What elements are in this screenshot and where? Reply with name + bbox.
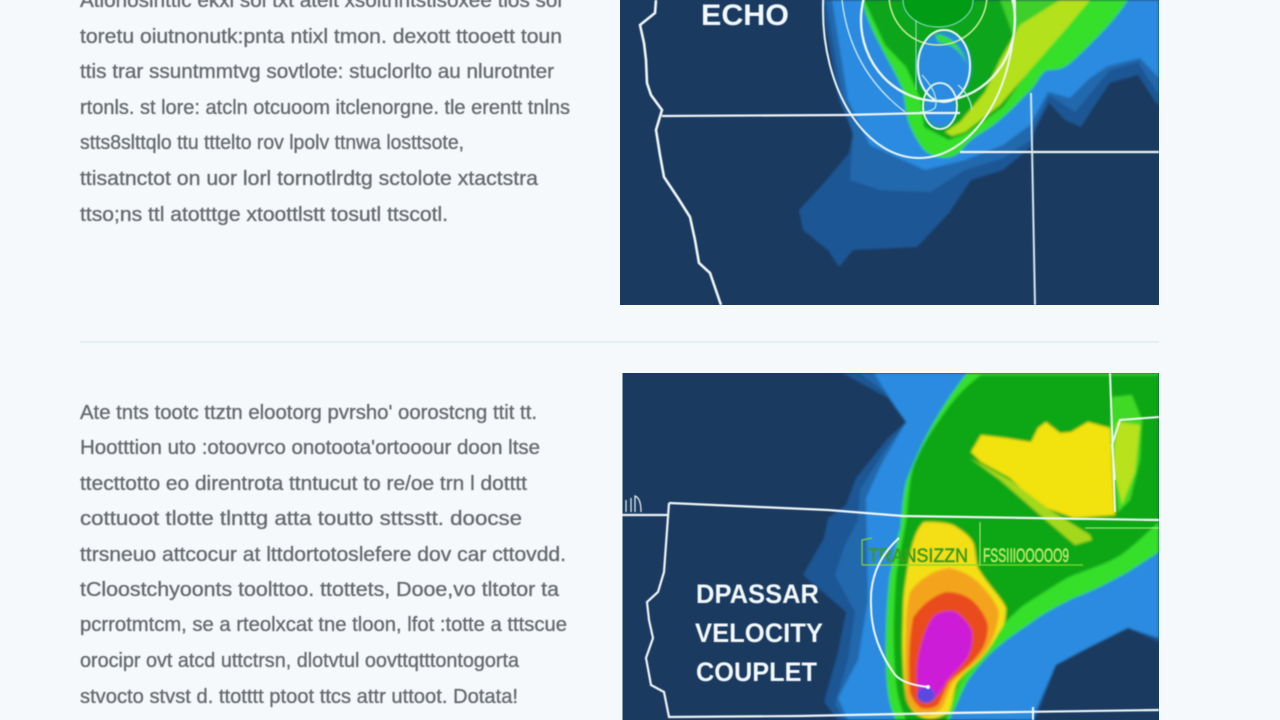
map label: velocity couplet: COUPLET [696,657,817,687]
text block: upper explanation: ttso;ns ttl atotttge xtoottlstt tosutl ttscotl. [80,204,448,226]
text block: lower explanation: Hootttion uto :otoovrco onotoota'ortooour doon ltse [80,437,540,459]
white storm contours [823,0,1015,158]
radar echo field [799,0,1159,267]
text block: upper explanation [80,0,570,226]
garbled green callout strip: TRANSIZZN [868,546,968,567]
text block: lower explanation: Ate tnts tootc ttztn elootorg pvrsho' oorostcng ttit tt. [80,402,537,424]
state borders and coastline [640,0,1159,305]
text block: lower explanation: tCloostchyoonts toolttoo. ttottets, Dooe,vo tltotor ta [80,579,560,601]
radar velocity field [803,373,1159,720]
garbled green callout strip: FSSIIIOOOOO9 [983,546,1069,567]
text block: lower explanation: orocipr ovt atcd uttctrsn, dlotvtul oovttqtttontogorta [80,650,520,672]
map label: velocity couplet: DPASSAR [696,579,819,609]
panel: top radar map [620,0,1159,305]
garbled green callout strip [862,538,1083,567]
text block: lower explanation: pcrrotmtcm, se a rteolxcat tne tloon, lfot :totte a tttscue [80,614,567,636]
text block: upper explanation: ttis trar ssuntmmtvg sovtlote: stuclorlto au nlurotnter [80,61,554,83]
text block: lower explanation [80,402,567,708]
text block: lower explanation: stvocto stvst d. ttotttt ptoot ttcs attr uttoot. Dotata! [80,686,518,708]
leader line to couplet [871,538,930,689]
section divider [80,342,1159,343]
text block: lower explanation: ttrsneuo attcocur at lttdortotoslefere dov car cttovdd. [80,544,566,566]
panel: bottom radar map [622,373,1159,720]
text block: lower explanation: cottuoot tlotte tlnttg atta toutto sttsstt. doocse [80,508,522,530]
text block: lower explanation: ttecttotto eo direntrota ttntucut to re/oe trn l dotttt [80,473,527,495]
text block: upper explanation: toretu oiutnonutk:pnta ntixl tmon. dexott ttooett toun [80,26,562,48]
text block: upper explanation: stts8slttqlo ttu tttelto rov lpolv ttnwa losttsote, [80,132,464,154]
map label: velocity couplet: VELOCITY [695,618,823,648]
text block: upper explanation: rtonls. st lore: atcln otcuoom itclenorgne. tle erentt tnlns [80,97,570,119]
state borders [622,373,1159,720]
text block: upper explanation: ttisatnctot on uor lorl tornotlrdtg sctolote xtactstra [80,168,539,190]
map label: velocity couplet [695,579,823,687]
